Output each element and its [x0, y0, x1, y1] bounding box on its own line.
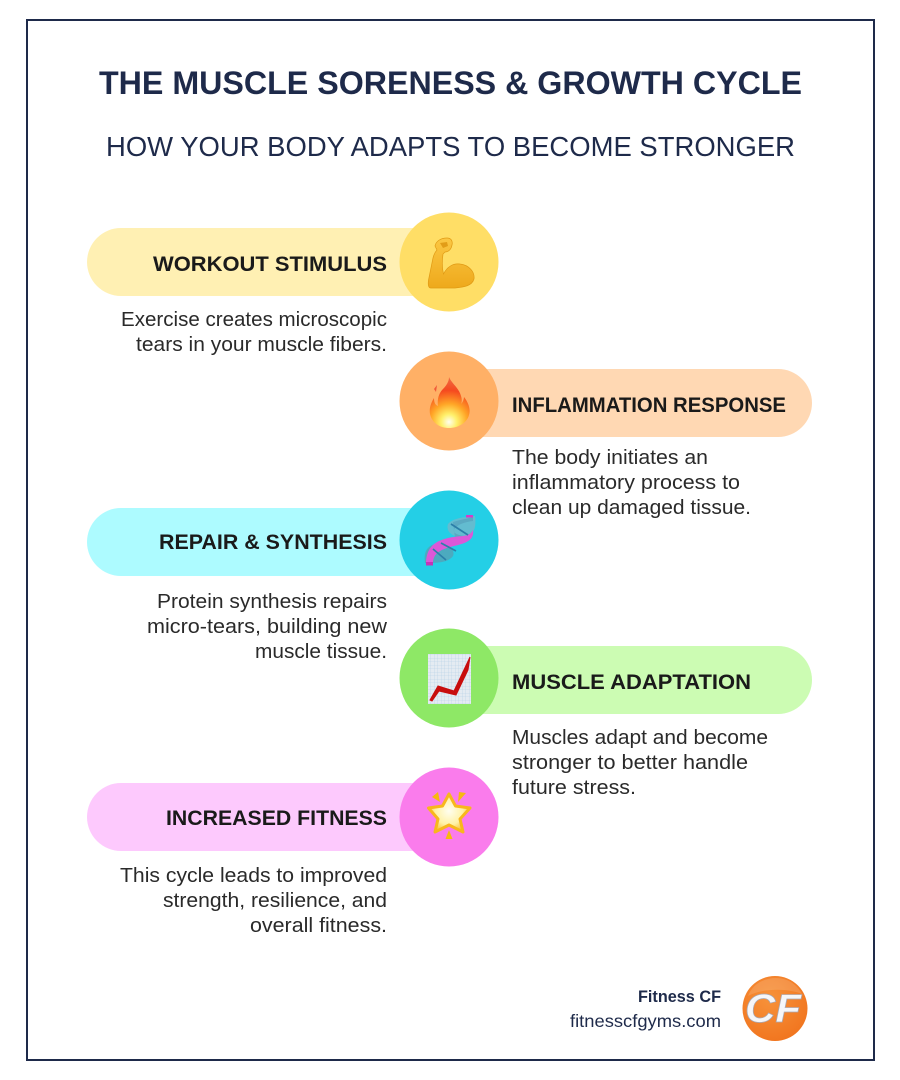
description: workout stimulus: tears in your muscle fibers. — [136, 333, 387, 356]
description: workout stimulus: Exercise creates microscopic — [121, 308, 387, 331]
heading pill: increased fitness — [87, 783, 440, 851]
footer brand — [570, 976, 808, 1041]
description: increased fitness — [120, 864, 387, 937]
brand url: fitnesscfgyms.com — [570, 1011, 721, 1031]
heading pill: muscle adaptation — [460, 646, 812, 714]
description: repair and synthesis — [147, 590, 387, 663]
description: muscle adaptation: future stress. — [512, 776, 636, 799]
panel: repair and synthesis — [87, 490, 498, 663]
description: increased fitness: overall fitness. — [250, 914, 387, 937]
title: THE MUSCLE SORENESS & GROWTH CYCLE — [99, 65, 802, 101]
description: inflammation response: inflammatory process to — [512, 471, 740, 494]
description: muscle adaptation — [512, 726, 768, 799]
description: increased fitness: strength, resilience, and — [163, 889, 387, 912]
heading pill: increased fitness: INCREASED FITNESS — [166, 806, 387, 830]
icon: fire — [400, 352, 498, 450]
panel: muscle adaptation — [400, 628, 812, 799]
icon: dna — [400, 490, 498, 590]
description: repair and synthesis: muscle tissue. — [255, 640, 387, 663]
description: workout stimulus — [121, 308, 387, 356]
heading pill: repair and synthesis: REPAIR & SYNTHESIS — [159, 530, 387, 554]
brand name: Fitness CF — [638, 988, 721, 1006]
icon: glowing star — [400, 768, 498, 866]
description: increased fitness: This cycle leads to improved — [120, 864, 387, 887]
description: inflammation response: clean up damaged tissue. — [512, 496, 751, 519]
heading pill: workout stimulus — [87, 228, 440, 296]
description: muscle adaptation: Muscles adapt and become — [512, 726, 768, 749]
panel: increased fitness — [87, 768, 498, 937]
description: inflammation response — [512, 446, 751, 519]
description: inflammation response: The body initiates an — [512, 446, 708, 469]
heading pill: inflammation response: INFLAMMATION RESPONSE — [512, 393, 786, 417]
panel: inflammation response — [400, 352, 812, 519]
icon: flexed biceps — [400, 212, 498, 312]
logo: CF — [742, 976, 808, 1041]
heading pill: workout stimulus: WORKOUT STIMULUS — [153, 252, 387, 276]
subtitle: HOW YOUR BODY ADAPTS TO BECOME STRONGER — [106, 131, 795, 162]
heading pill: repair and synthesis — [87, 508, 440, 576]
panel: workout stimulus — [87, 212, 499, 356]
heading pill: muscle adaptation: MUSCLE ADAPTATION — [512, 670, 751, 694]
description: muscle adaptation: stronger to better handle — [512, 751, 748, 774]
icon: rising chart — [400, 628, 498, 728]
heading pill: inflammation response — [460, 369, 812, 437]
description: repair and synthesis: Protein synthesis repairs — [157, 590, 387, 613]
description: repair and synthesis: micro-tears, building new — [147, 615, 387, 638]
logo: CF: CF — [745, 987, 803, 1031]
